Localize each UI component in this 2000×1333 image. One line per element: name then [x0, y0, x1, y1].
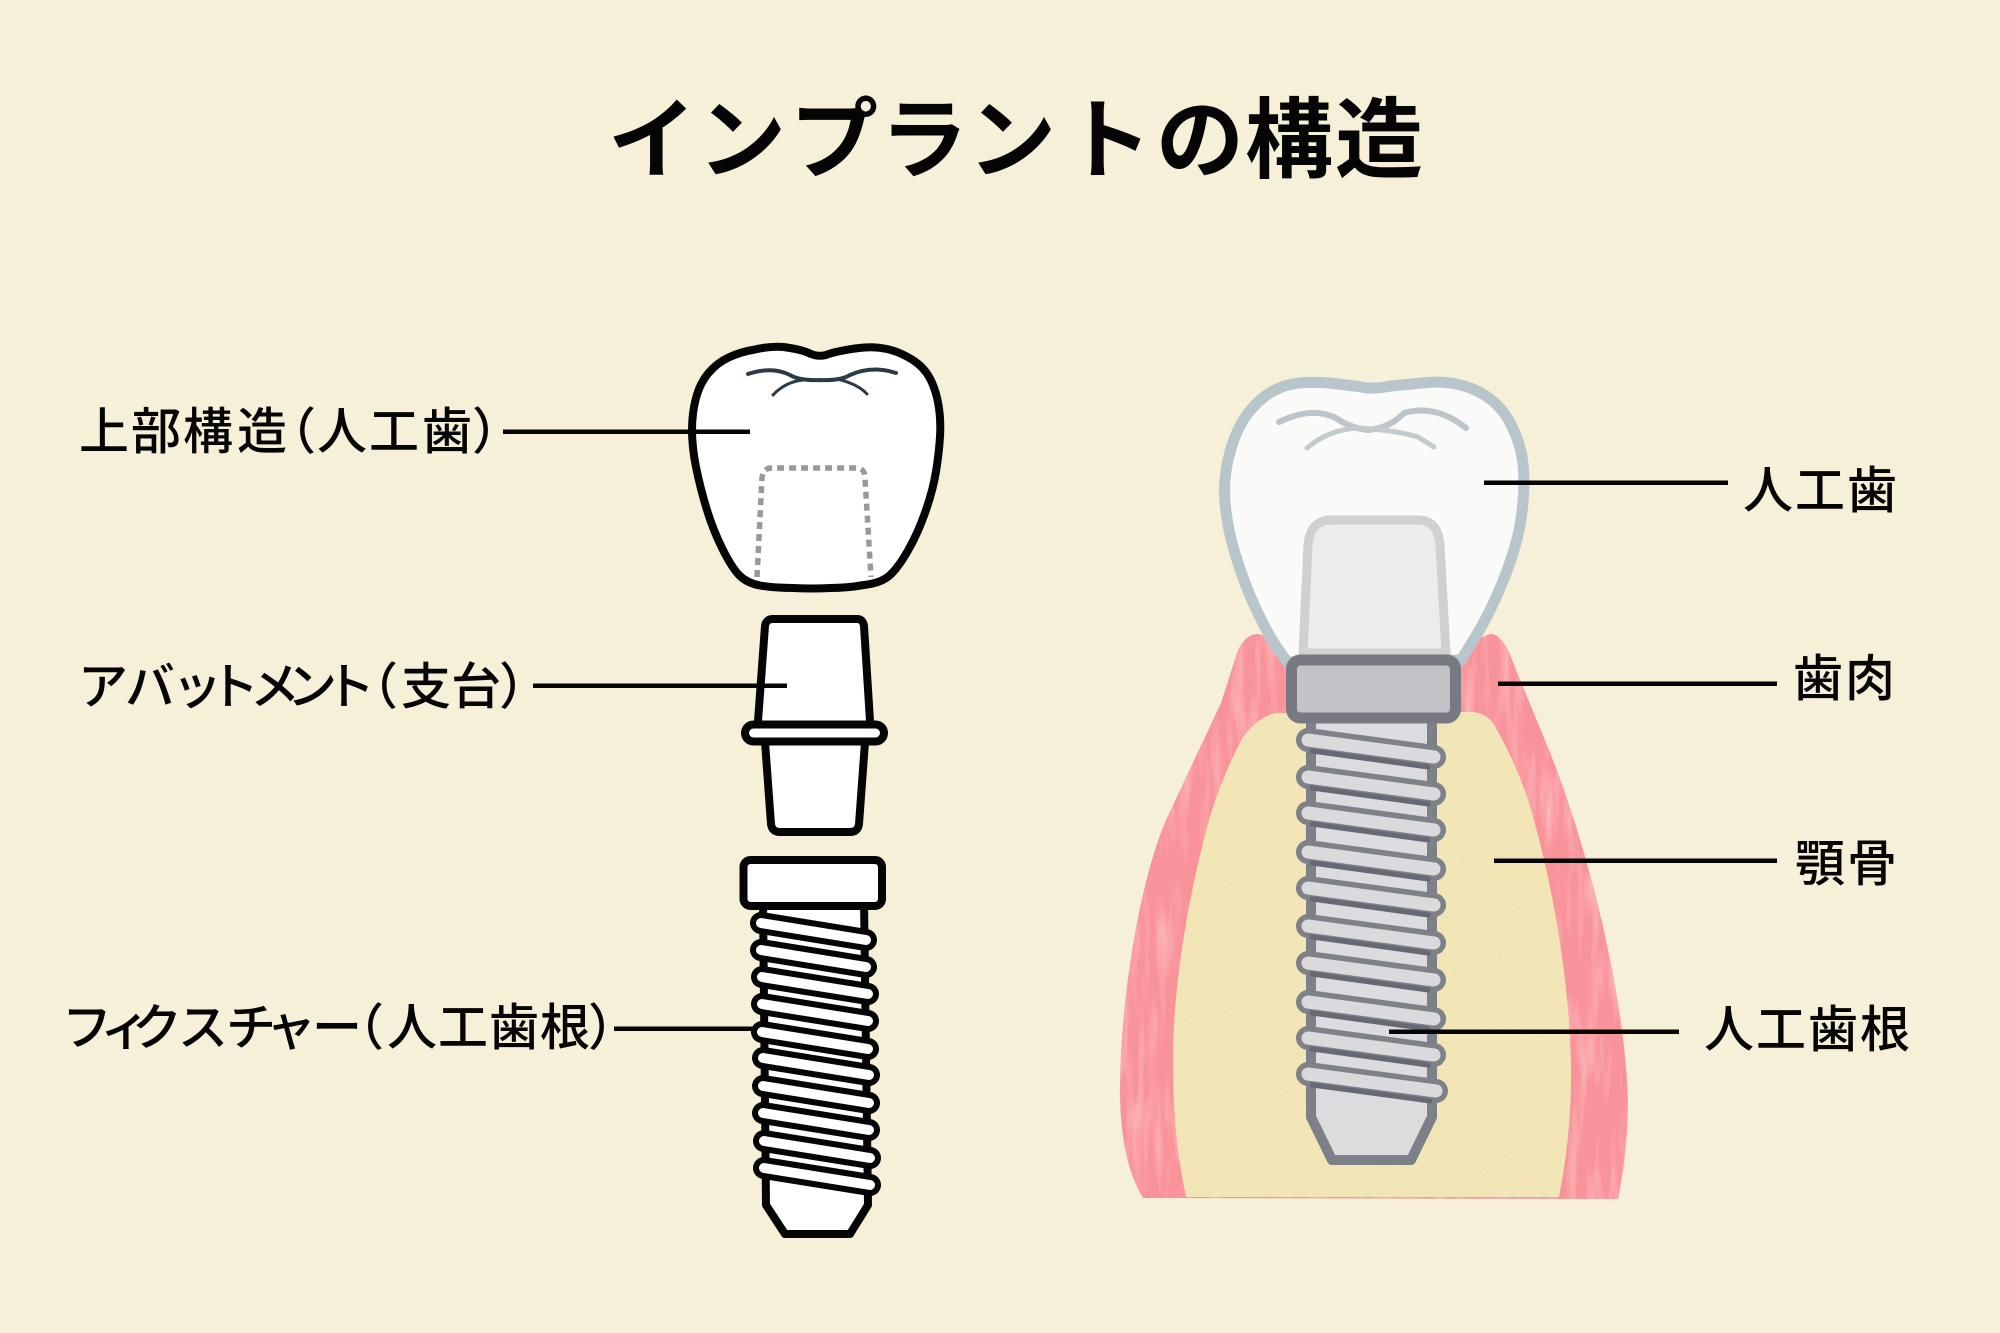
abutment collar [1292, 660, 1456, 718]
right label: artificial tooth root: 人工歯根 [1704, 1002, 1910, 1058]
right label: artificial tooth [1484, 463, 1897, 519]
diagram: exploded implant parts [692, 347, 940, 1234]
fixture screw in the bone [1308, 712, 1436, 1160]
diagram: implant placed in the jaw [1120, 382, 1628, 1199]
left label: abutment [78, 659, 787, 715]
jaw bone [1173, 712, 1571, 1197]
left label: upper structure: 上部構造（人工歯） [79, 404, 522, 460]
left label: upper structure [79, 404, 750, 460]
right label: jaw bone: 顎骨 [1795, 836, 1897, 892]
right label: gum [1498, 651, 1895, 707]
right label: jaw bone [1494, 836, 1897, 892]
title: インプラントの構造 [608, 91, 1423, 190]
right label: artificial tooth root [1389, 1002, 1910, 1058]
crown: upper structure [692, 347, 940, 588]
left label: fixture: フィクスチャー（人工歯根） [62, 1000, 638, 1056]
right label: artificial tooth: 人工歯 [1743, 463, 1897, 519]
abutment: upper post, ring and lower post [745, 619, 884, 832]
artificial tooth [1225, 382, 1524, 662]
gum [1120, 634, 1628, 1199]
left label: abutment: アバットメント（支台） [78, 659, 549, 715]
right label: gum: 歯肉 [1793, 651, 1895, 707]
fixture: screw with threads [744, 860, 882, 1234]
